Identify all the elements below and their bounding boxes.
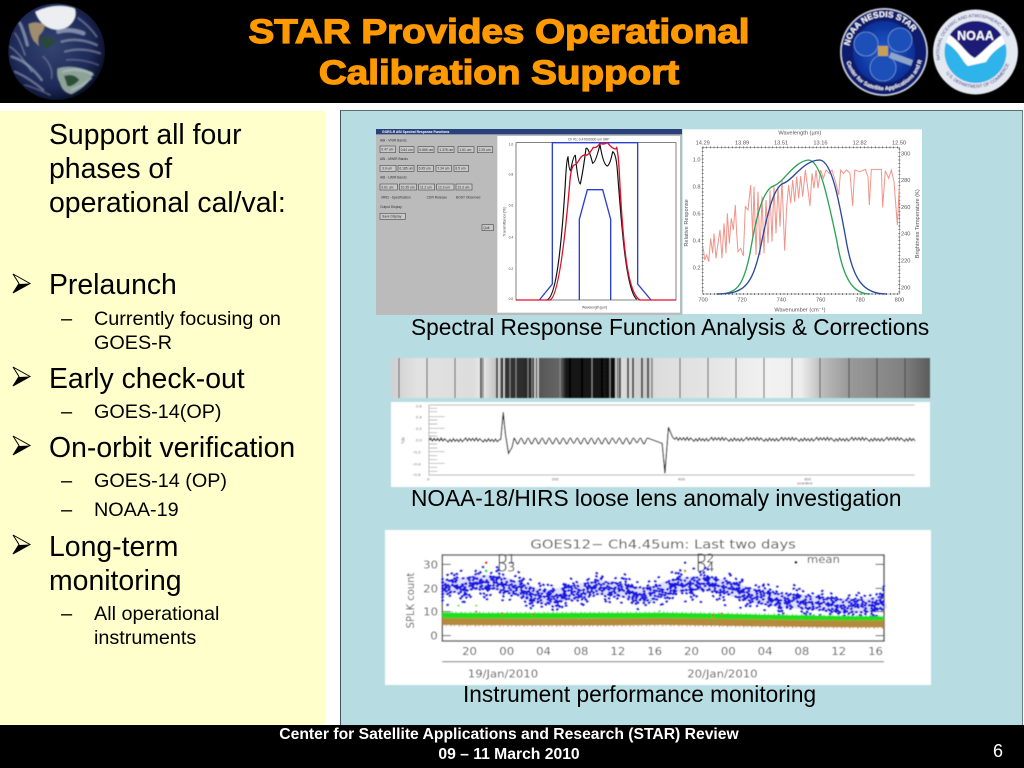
chart: relative response vs wavenumber: 720 <box>737 297 747 303</box>
bullet: Prelaunch: Currently focusing on <box>94 308 281 330</box>
chart: anomaly trace: 0.4 <box>416 414 422 419</box>
chart: anomaly trace: 0.0 <box>416 438 422 443</box>
chart: spectral response tool screenshot: 0.6 <box>509 204 513 208</box>
bullet: Prelaunch <box>12 269 281 354</box>
chart: GOES12 SPLK count scatter: 00 <box>721 644 736 658</box>
chart: relative response vs wavenumber: 300 <box>901 151 910 157</box>
chart: relative response vs wavenumber: 12.82 <box>853 141 867 147</box>
chart: anomaly trace: −0.2 <box>412 449 421 454</box>
chart: spectral response tool screenshot: 6.185 um <box>399 167 413 171</box>
chart: spectral response tool screenshot: 0.2 <box>509 267 513 271</box>
intro text <box>49 119 286 219</box>
chart: relative response vs wavenumber: 260 <box>901 205 910 211</box>
icon: NOAA NESDIS STAR seal <box>839 7 929 97</box>
image: scan strip <box>391 358 930 398</box>
chart: relative response vs wavenumber: 1.0 <box>693 158 701 164</box>
bullet: On-orbit verification: GOES-14 (OP) <box>94 470 227 492</box>
chart: GOES12 SPLK count scatter: GOES12− Ch4.45um: Last two days <box>530 538 796 551</box>
chart: spectral response tool screenshot: 10.35 um <box>401 185 415 189</box>
chart: GOES12 SPLK count scatter: 20 <box>684 644 699 658</box>
bullet: Prelaunch: Prelaunch <box>49 269 177 301</box>
chart: relative response vs wavenumber: 14.29 <box>696 141 710 147</box>
title: STAR Provides Operational <box>248 12 750 50</box>
chart: relative response vs wavenumber: 240 <box>901 232 910 238</box>
chart: spectral response tool screenshot <box>376 129 682 315</box>
chart: spectral response tool screenshot: 11.2 um <box>420 185 432 189</box>
icon: NOAA seal: U.S. DEPARTMENT OF COMMERCE <box>946 62 1010 88</box>
bullet: Long-term monitoring: monitoring <box>49 565 182 597</box>
caption: loose lens: NOAA-18/HIRS loose lens anomaly investigation <box>411 485 902 511</box>
chart: relative response vs wavenumber: Wavelength (µm) <box>778 131 821 137</box>
chart: spectral response tool screenshot: 0.0 <box>509 297 513 301</box>
chart: GOES12 SPLK count scatter: 30 <box>423 558 438 571</box>
chart: GOES12 SPLK count scatter: 19/Jan/2010 <box>468 667 538 681</box>
chart: GOES12 SPLK count scatter: SPLK count <box>405 573 417 628</box>
bullet: Early check-out <box>12 363 245 423</box>
chart: relative response vs wavenumber: 700 <box>698 297 708 303</box>
chart: GOES12 SPLK count scatter: 04 <box>758 644 773 658</box>
chart: relative response vs wavenumber: 220 <box>901 259 910 265</box>
chart: spectral response tool screenshot: CDR Release <box>427 196 447 200</box>
chart: spectral response tool screenshot: 2.25 um <box>479 148 491 152</box>
bullet: Long-term monitoring: Long-term <box>49 531 178 563</box>
intro text: phases of <box>49 153 172 185</box>
title <box>248 12 750 92</box>
chart: relative response vs wavenumber: 12.50 <box>892 141 906 147</box>
chart: GOES12 SPLK count scatter: D4 <box>696 561 714 575</box>
chart: relative response vs wavenumber: 13.89 <box>735 141 749 147</box>
chart: GOES12 SPLK count scatter: D3 <box>498 561 515 575</box>
chart: relative response vs wavenumber: 760 <box>816 297 825 303</box>
chart: GOES12 SPLK count scatter: 12 <box>831 644 846 658</box>
bullet: On-orbit verification: NOAA-19 <box>94 499 179 521</box>
chart: anomaly trace: −0.6 <box>412 472 421 477</box>
chart: relative response vs wavenumber: 0.4 <box>693 239 701 245</box>
bullet: Long-term monitoring: instruments <box>94 627 196 649</box>
chart: spectral response tool screenshot: 3.9 um <box>382 167 392 171</box>
chart: spectral response tool screenshot: ABI - VNIR Bands <box>380 138 407 142</box>
chart: relative response vs wavenumber: 200 <box>901 286 910 292</box>
chart: spectral response tool screenshot: 1.61 um <box>459 148 472 152</box>
chart: spectral response tool screenshot: 0.865 um <box>419 148 433 152</box>
bullet: Long-term monitoring: All operational <box>94 603 219 625</box>
chart: spectral response tool screenshot: 0.8 <box>509 172 513 176</box>
caption: instrument monitoring: Instrument performance monitoring <box>463 681 816 707</box>
bullet: On-orbit verification <box>12 432 295 521</box>
chart: anomaly trace: 0.6 <box>416 403 422 408</box>
icon: NOAA NESDIS STAR seal: NOAA NESDIS STAR <box>843 10 918 46</box>
bullet: Early check-out: GOES-14(OP) <box>94 401 222 423</box>
chart: anomaly trace: 200 <box>552 477 559 482</box>
chart: GOES12 SPLK count scatter: D2 <box>696 552 714 565</box>
chart: spectral response tool screenshot: Output Display <box>380 205 402 209</box>
footer bar <box>0 725 1024 768</box>
chart: spectral response tool screenshot: GOES-R ABI Spectral Response Functions <box>382 130 450 134</box>
bullet: Long-term monitoring <box>12 531 219 649</box>
chart: GOES12 SPLK count scatter: mean <box>807 552 840 566</box>
chart: relative response vs wavenumber: Wavenumber (cm⁻¹) <box>774 307 826 313</box>
chart: spectral response tool screenshot: Transmittance [%] <box>502 207 506 237</box>
panel: phases of cal/val <box>0 111 325 725</box>
chart: GOES12 SPLK count scatter: D1 <box>498 552 515 566</box>
bullet: Early check-out: Early check-out <box>49 363 245 395</box>
chart: spectral response tool screenshot: 1.378 um <box>439 148 453 152</box>
chart: anomaly trace <box>391 402 930 487</box>
bullet: On-orbit verification: – <box>61 470 72 492</box>
chart: GOES12 SPLK count scatter: 20 <box>462 644 477 658</box>
chart: GOES12 SPLK count scatter <box>385 530 931 685</box>
icon: NOAA seal <box>932 8 1019 96</box>
chart: spectral response tool screenshot: 13.3 um <box>457 185 470 189</box>
panel: chart background <box>340 110 1023 725</box>
chart: spectral response tool screenshot: Quit <box>483 226 490 230</box>
chart: GOES12 SPLK count scatter: 16 <box>647 644 662 658</box>
chart: GOES12 SPLK count scatter: 12 <box>610 644 625 658</box>
chart: relative response vs wavenumber: 0.6 <box>693 212 701 218</box>
chart: relative response vs wavenumber: 740 <box>777 297 786 303</box>
title: Calibration Support <box>319 54 679 92</box>
intro text: Support all four <box>49 119 242 151</box>
chart: GOES12 SPLK count scatter: 04 <box>536 644 551 658</box>
chart: spectral response tool screenshot: ABI - MWIR Bands <box>380 157 408 161</box>
chart: relative response vs wavenumber: 800 <box>895 297 904 303</box>
chart: GOES12 SPLK count scatter: 08 <box>574 644 588 658</box>
chart: relative response vs wavenumber: 0.2 <box>693 266 701 272</box>
chart: spectral response tool screenshot: 0.64 um <box>401 148 413 152</box>
chart: anomaly trace: −0.4 <box>412 461 421 466</box>
bullet: Long-term monitoring: – <box>61 603 72 625</box>
chart: spectral response tool screenshot: 1.0 <box>509 142 513 146</box>
bullet: On-orbit verification: On-orbit verification <box>49 432 295 464</box>
chart: spectral response tool screenshot: MRD - Specification <box>381 196 411 200</box>
chart: relative response vs wavenumber <box>683 129 922 314</box>
chart: spectral response tool screenshot: Save Display <box>382 215 402 219</box>
chart: spectral response tool screenshot: ABI - LWIR Bands <box>380 176 407 180</box>
chart: GOES12 SPLK count scatter: 20 <box>423 582 438 595</box>
chart: relative response vs wavenumber: 13.16 <box>813 141 827 147</box>
chart: GOES12 SPLK count scatter: 00 <box>499 644 514 658</box>
intro text: operational cal/val: <box>49 187 286 219</box>
chart: spectral response tool screenshot: 6.95 um <box>419 167 431 171</box>
bullet: On-orbit verification: – <box>61 499 72 521</box>
footer text: Center for Satellite Applications and Research (STAR) Review <box>279 726 739 743</box>
chart: spectral response tool screenshot: 0.4 <box>509 236 513 240</box>
chart: relative response vs wavenumber: Relative Response <box>684 199 690 247</box>
chart: spectral response tool screenshot: 9.61 um <box>381 185 394 189</box>
chart: spectral response tool screenshot: 7.34 um <box>437 167 450 171</box>
chart: spectral response tool screenshot: 12.3 um <box>438 185 450 189</box>
caption: spectral response: Spectral Response Function Analysis & Corrections <box>411 314 929 340</box>
chart: GOES12 SPLK count scatter: 20/Jan/2010 <box>687 667 758 681</box>
chart: anomaly trace: scanline <box>797 481 813 486</box>
icon: earth globe <box>8 3 105 100</box>
chart: relative response vs wavenumber: Brightness Temperature (K) <box>915 189 921 258</box>
chart: relative response vs wavenumber: 780 <box>855 297 865 303</box>
chart: anomaly trace: 0.2 <box>416 426 422 431</box>
chart: anomaly trace: 400 <box>678 477 686 482</box>
chart: spectral response tool screenshot: Ch #1: 0.47000000 um SRF <box>568 138 609 142</box>
chart: spectral response tool screenshot: 8.5 um <box>455 167 466 171</box>
chart: GOES12 SPLK count scatter: 08 <box>794 644 809 658</box>
chart: anomaly trace: 0 <box>427 477 430 482</box>
page number: 6 <box>993 741 1003 761</box>
bullet: Prelaunch: – <box>61 308 72 330</box>
chart: spectral response tool screenshot: BOST Observed <box>456 196 481 200</box>
icon: NOAA seal: NOAA <box>957 29 994 43</box>
chart: relative response vs wavenumber: 0.8 <box>693 185 701 191</box>
chart: spectral response tool screenshot: 0.47 um <box>381 148 394 152</box>
chart: anomaly trace: 600 <box>804 477 812 482</box>
footer text: 09 – 11 March 2010 <box>438 746 580 762</box>
chart: GOES12 SPLK count scatter: 16 <box>868 644 883 658</box>
header bar <box>0 0 1024 103</box>
chart: GOES12 SPLK count scatter: 0 <box>430 629 438 643</box>
footer text <box>279 726 739 762</box>
chart: relative response vs wavenumber: 13.51 <box>774 141 788 147</box>
chart: spectral response tool screenshot: Wavelength [µm] <box>582 306 607 310</box>
bullet: Prelaunch: GOES-R <box>94 332 172 354</box>
chart: relative response vs wavenumber: 280 <box>901 178 910 184</box>
chart: GOES12 SPLK count scatter: 10 <box>423 605 438 619</box>
chart: anomaly trace: Tdo <box>400 436 405 444</box>
bullet: Early check-out: – <box>61 401 72 423</box>
